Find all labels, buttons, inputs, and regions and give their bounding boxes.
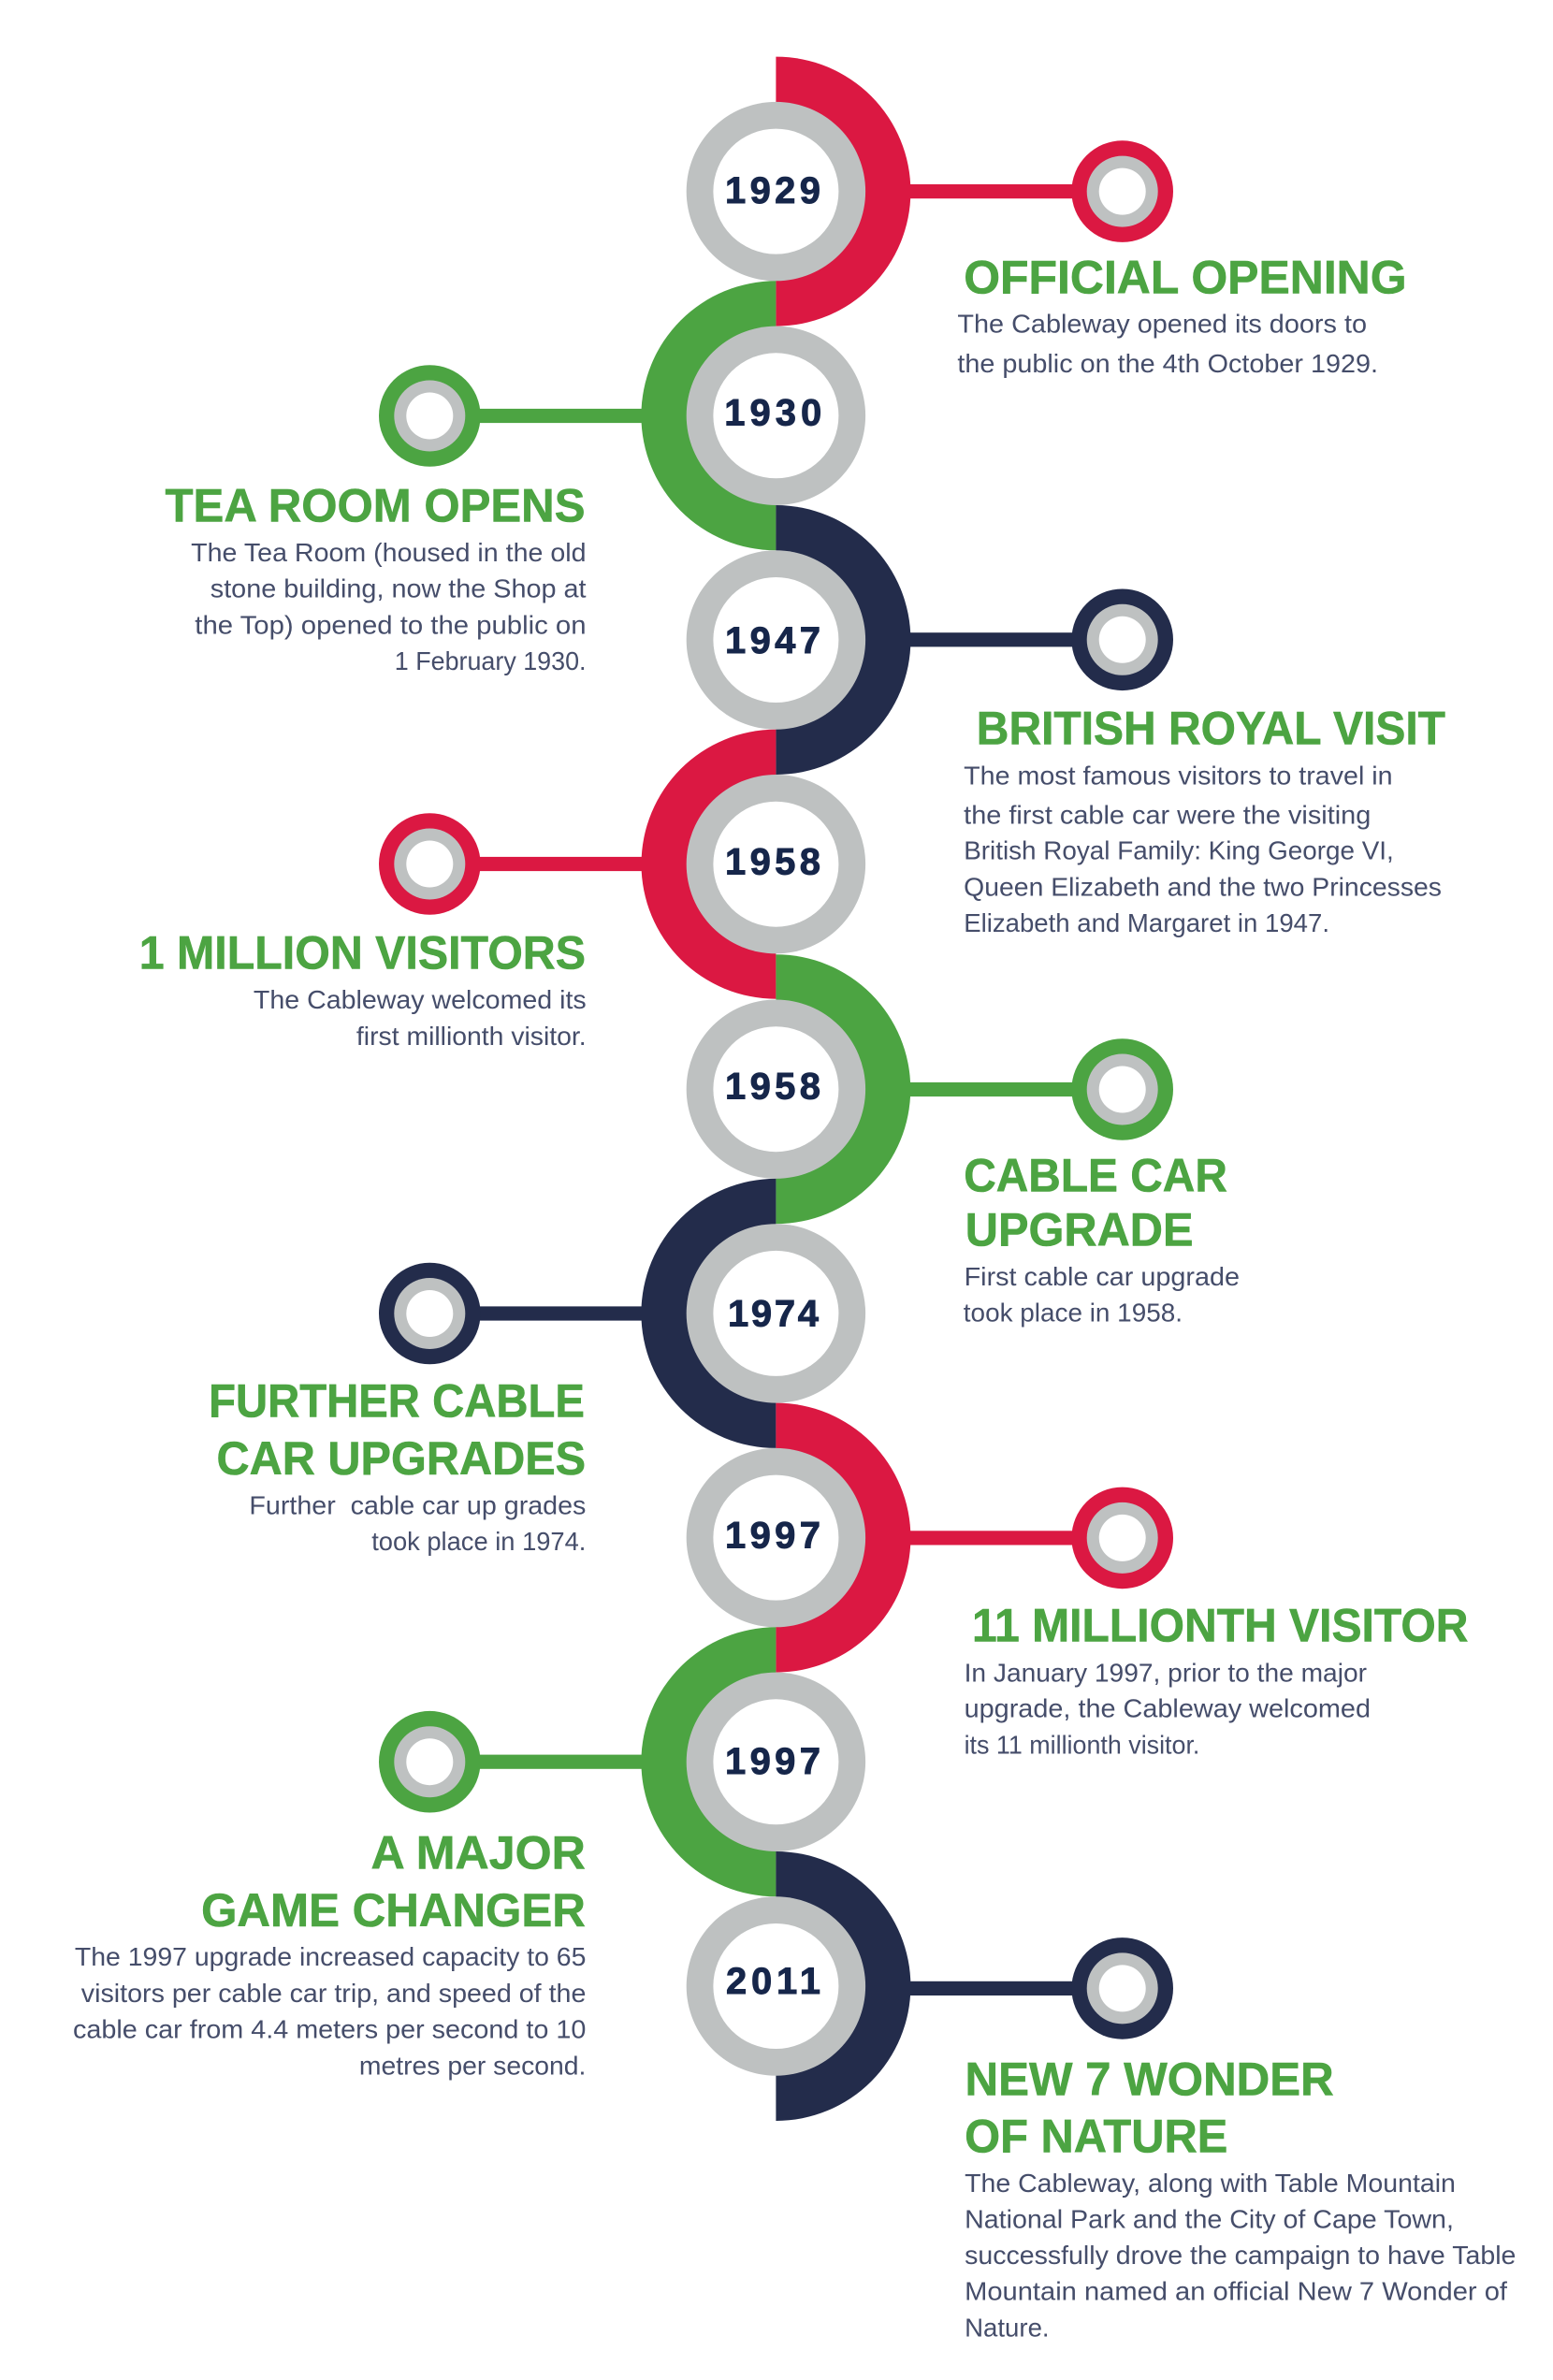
heading: FURTHER CABLE: [209, 1374, 585, 1427]
node icon: [1071, 589, 1173, 690]
node icon: [1071, 1488, 1173, 1589]
description: [191, 538, 587, 675]
half ring: green left: [641, 281, 776, 550]
description: [254, 985, 587, 1051]
year badge 1997: 1997: [725, 1741, 820, 1782]
description: In January 1997, prior to the major: [965, 1658, 1367, 1688]
milestone: 1929 official opening: [687, 57, 1407, 378]
description: The most famous visitors to travel in: [964, 761, 1393, 790]
year badge 1974: [687, 1224, 865, 1403]
description: upgrade, the Cableway welcomed: [965, 1694, 1371, 1723]
heading: OF NATURE: [965, 2111, 1227, 2163]
description: stone building, now the Shop at: [210, 574, 587, 603]
connector line: [478, 857, 642, 871]
heading: CAR UPGRADES: [217, 1432, 586, 1485]
node icon: [379, 1263, 481, 1364]
description: Further cable car up grades: [249, 1490, 586, 1519]
description: the Top) opened to the public on: [195, 610, 587, 639]
node icon: [379, 1711, 481, 1812]
half ring: green right: [776, 954, 910, 1224]
description: successfully drove the campaign to have Table: [965, 2241, 1516, 2270]
heading: CABLE CAR: [964, 1149, 1227, 1201]
heading: 11 MILLIONTH VISITOR: [972, 1600, 1468, 1652]
description: The Tea Room (housed in the old: [191, 538, 586, 567]
description: took place in 1958.: [964, 1298, 1183, 1327]
connector line: [478, 1306, 642, 1321]
description: The 1997 upgrade increased capacity to 65: [75, 1942, 586, 1971]
year badge 1997: [687, 1673, 865, 1851]
description: [965, 1658, 1371, 1759]
description: its 11 millionth visitor.: [965, 1730, 1199, 1759]
description: The Cableway opened its doors to: [957, 310, 1367, 339]
milestone: 1947 british royal visit: [687, 505, 1445, 937]
heading: [201, 1827, 586, 1937]
description: [964, 761, 1442, 937]
year badge 1974: 1974: [728, 1293, 820, 1334]
description: Queen Elizabeth and the two Princesses: [964, 872, 1442, 901]
milestone: 2011 new 7 wonder of nature: [687, 1851, 1516, 2342]
year badge 1958: [687, 775, 865, 953]
node icon: [379, 365, 481, 467]
connector line: [910, 1082, 1074, 1096]
description: the public on the 4th October 1929.: [957, 349, 1378, 378]
connector line: [910, 184, 1074, 198]
year badge 1947: 1947: [725, 620, 820, 661]
year badge 1930: [687, 327, 865, 505]
half ring: red left: [641, 730, 776, 999]
half ring: navy right: [776, 1851, 910, 2121]
connector line: [478, 1755, 642, 1769]
description: The Cableway, along with Table Mountain: [965, 2169, 1456, 2198]
description: Mountain named an official New 7 Wonder of: [965, 2277, 1507, 2306]
heading: [209, 1374, 586, 1485]
heading: [965, 2053, 1334, 2163]
milestone: 1958 one million visitors: [139, 730, 865, 1051]
half ring: navy right: [776, 505, 910, 775]
heading: NEW 7 WONDER: [965, 2053, 1334, 2105]
node icon: [379, 813, 481, 915]
milestone: 1997 a major game changer: [73, 1627, 865, 2080]
description: first millionth visitor.: [356, 1022, 587, 1051]
description: cable car from 4.4 meters per second to 10: [73, 2015, 586, 2044]
heading: A MAJOR: [370, 1827, 586, 1879]
year badge 1958: 1958: [725, 1067, 820, 1108]
heading: TEA ROOM OPENS: [165, 480, 586, 532]
year badge 1929: 1929: [725, 170, 820, 211]
heading: [964, 1149, 1227, 1256]
milestone: 1958 cable car upgrade: [687, 954, 1240, 1327]
year badge 1997: 1997: [725, 1516, 820, 1557]
node icon: [1071, 140, 1173, 242]
year badge 1929: [687, 102, 865, 281]
description: The Cableway welcomed its: [254, 985, 587, 1014]
connector line: [910, 632, 1074, 646]
year badge 1997: [687, 1448, 865, 1627]
description: 1 February 1930.: [395, 646, 586, 675]
half ring: navy left: [641, 1179, 776, 1448]
heading: BRITISH ROYAL VISIT: [977, 702, 1445, 754]
description: visitors per cable car trip, and speed of the: [81, 1979, 586, 2008]
heading: GAME CHANGER: [201, 1884, 586, 1937]
description: the first cable car were the visiting: [964, 800, 1371, 829]
description: [964, 1262, 1240, 1327]
milestone: 1930 tea room opens: [165, 281, 865, 675]
connector line: [910, 1981, 1074, 1995]
description: Elizabeth and Margaret in 1947.: [964, 908, 1329, 937]
year badge 1958: [687, 999, 865, 1179]
description: [249, 1490, 586, 1556]
year badge 1930: 1930: [724, 392, 821, 433]
half ring: red right: [776, 57, 910, 327]
heading: OFFICIAL OPENING: [964, 252, 1407, 304]
half ring: red right: [776, 1403, 910, 1673]
description: [965, 2169, 1516, 2342]
description: First cable car upgrade: [965, 1262, 1240, 1291]
heading: 1 MILLION VISITORS: [139, 927, 586, 980]
half ring: green left: [641, 1627, 776, 1896]
connector line: [478, 409, 642, 423]
year badge 2011: 2011: [726, 1961, 820, 2002]
description: Nature.: [965, 2313, 1050, 2342]
description: [957, 310, 1378, 378]
connector line: [910, 1531, 1074, 1546]
node icon: [1071, 1038, 1173, 1140]
description: [73, 1942, 586, 2080]
milestone: 1974 further upgrades: [209, 1179, 865, 1556]
year badge 1958: 1958: [725, 842, 820, 883]
milestone: 1997 eleven millionth visitor: [687, 1403, 1468, 1759]
heading: UPGRADE: [965, 1204, 1194, 1256]
year badge 2011: [687, 1896, 865, 2076]
description: British Royal Family: King George VI,: [964, 836, 1394, 865]
description: metres per second.: [359, 2051, 586, 2080]
description: National Park and the City of Cape Town,: [965, 2205, 1454, 2234]
year badge 1947: [687, 550, 865, 730]
node icon: [1071, 1937, 1173, 2039]
description: took place in 1974.: [371, 1527, 586, 1556]
